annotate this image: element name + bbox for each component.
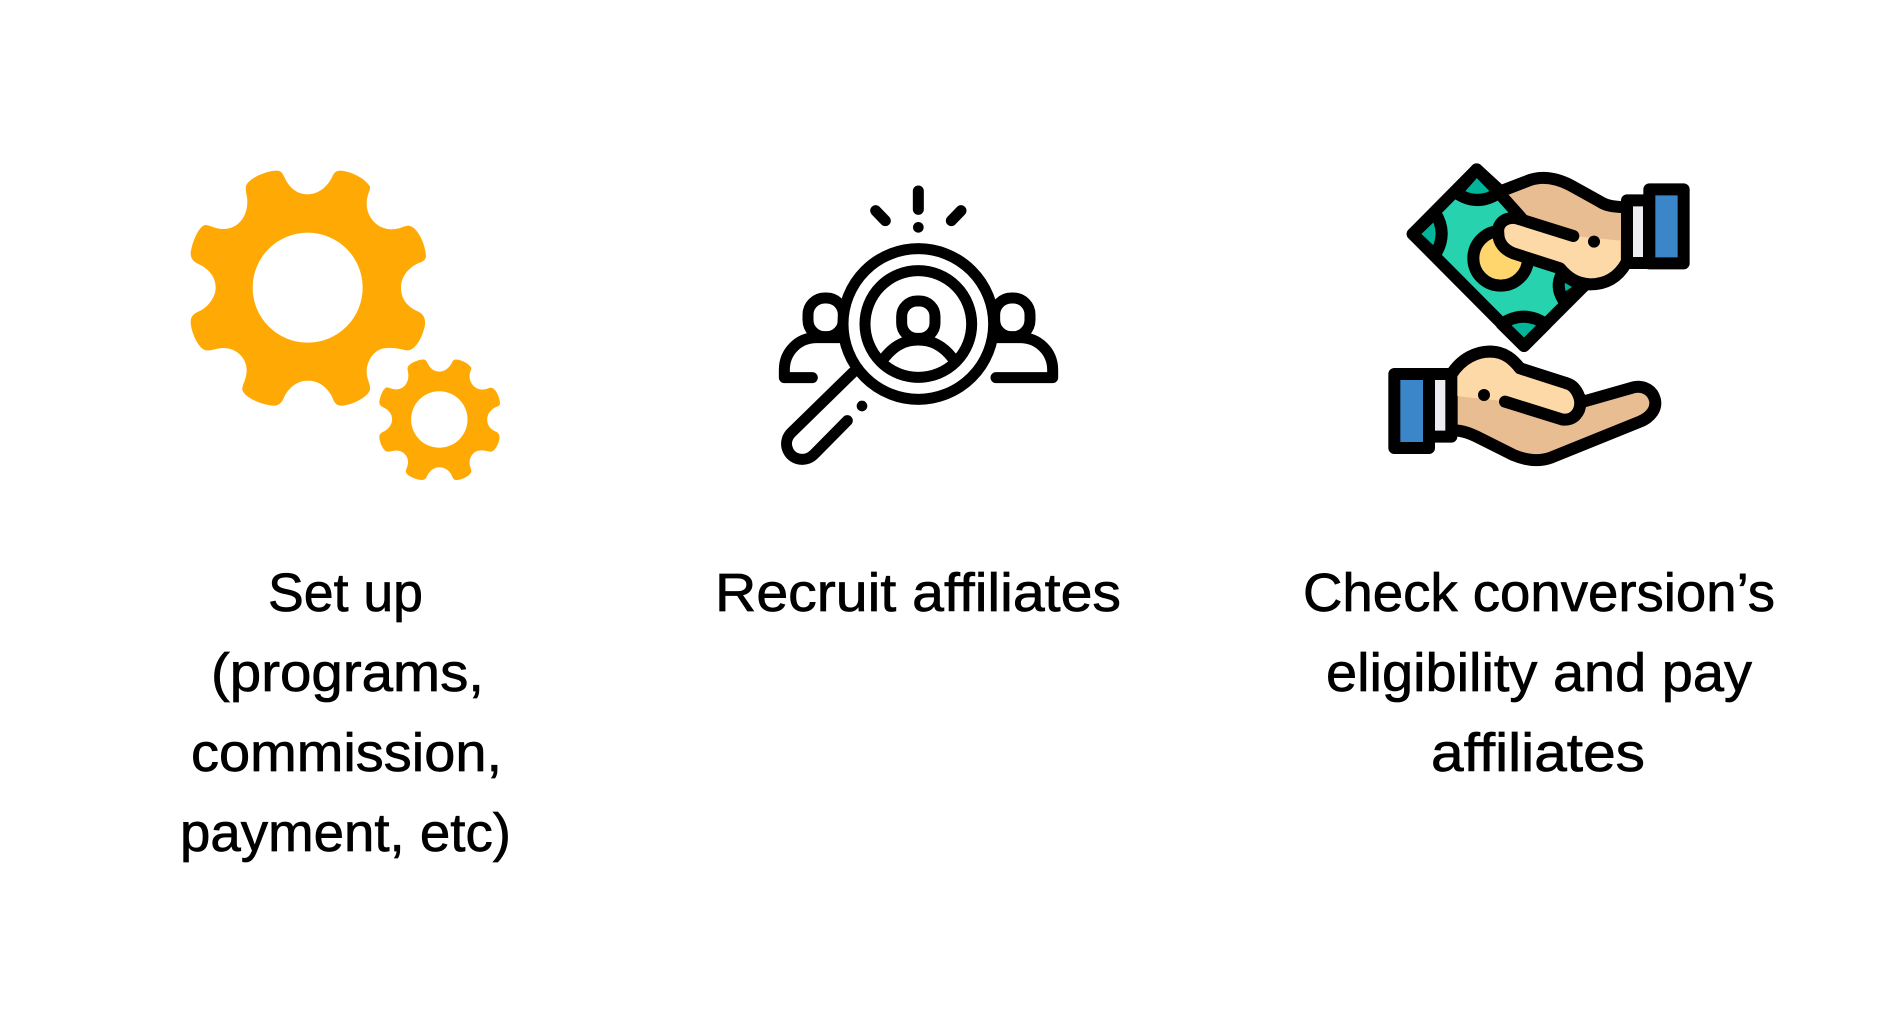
text: check conversions: affiliates (1431, 723, 1645, 783)
icon: magnifier handle (787, 373, 867, 459)
icon: right person (992, 298, 1053, 378)
icon: lower hand (1452, 352, 1655, 460)
icon: upper cuff (1627, 189, 1684, 263)
icon: magnifier lens (843, 249, 994, 399)
icon: upper hand (1498, 177, 1626, 285)
text: check conversions: Check conversion’s (1303, 563, 1775, 623)
text: set up: commission, (191, 723, 502, 783)
text: set up: payment, etc) (180, 803, 511, 863)
text: set up: Set up (268, 563, 423, 623)
icon: lower cuff (1394, 374, 1451, 448)
icon: hands exchanging money (1394, 169, 1684, 460)
icon: gears (191, 171, 500, 480)
text: set up: (programs, (211, 643, 484, 703)
icon: large gear (191, 171, 426, 406)
text: set up (180, 563, 511, 863)
text: check conversions (1303, 563, 1775, 783)
text: recruit affiliates: Recruit affiliates (715, 563, 1121, 623)
icon: alert marks (876, 191, 961, 233)
text: check conversions: eligibility and pay (1326, 643, 1752, 703)
icon: left person (784, 298, 845, 378)
icon: banknote (1413, 169, 1593, 346)
icon: magnifier over people (784, 191, 1053, 459)
icon: small gear (379, 359, 500, 480)
